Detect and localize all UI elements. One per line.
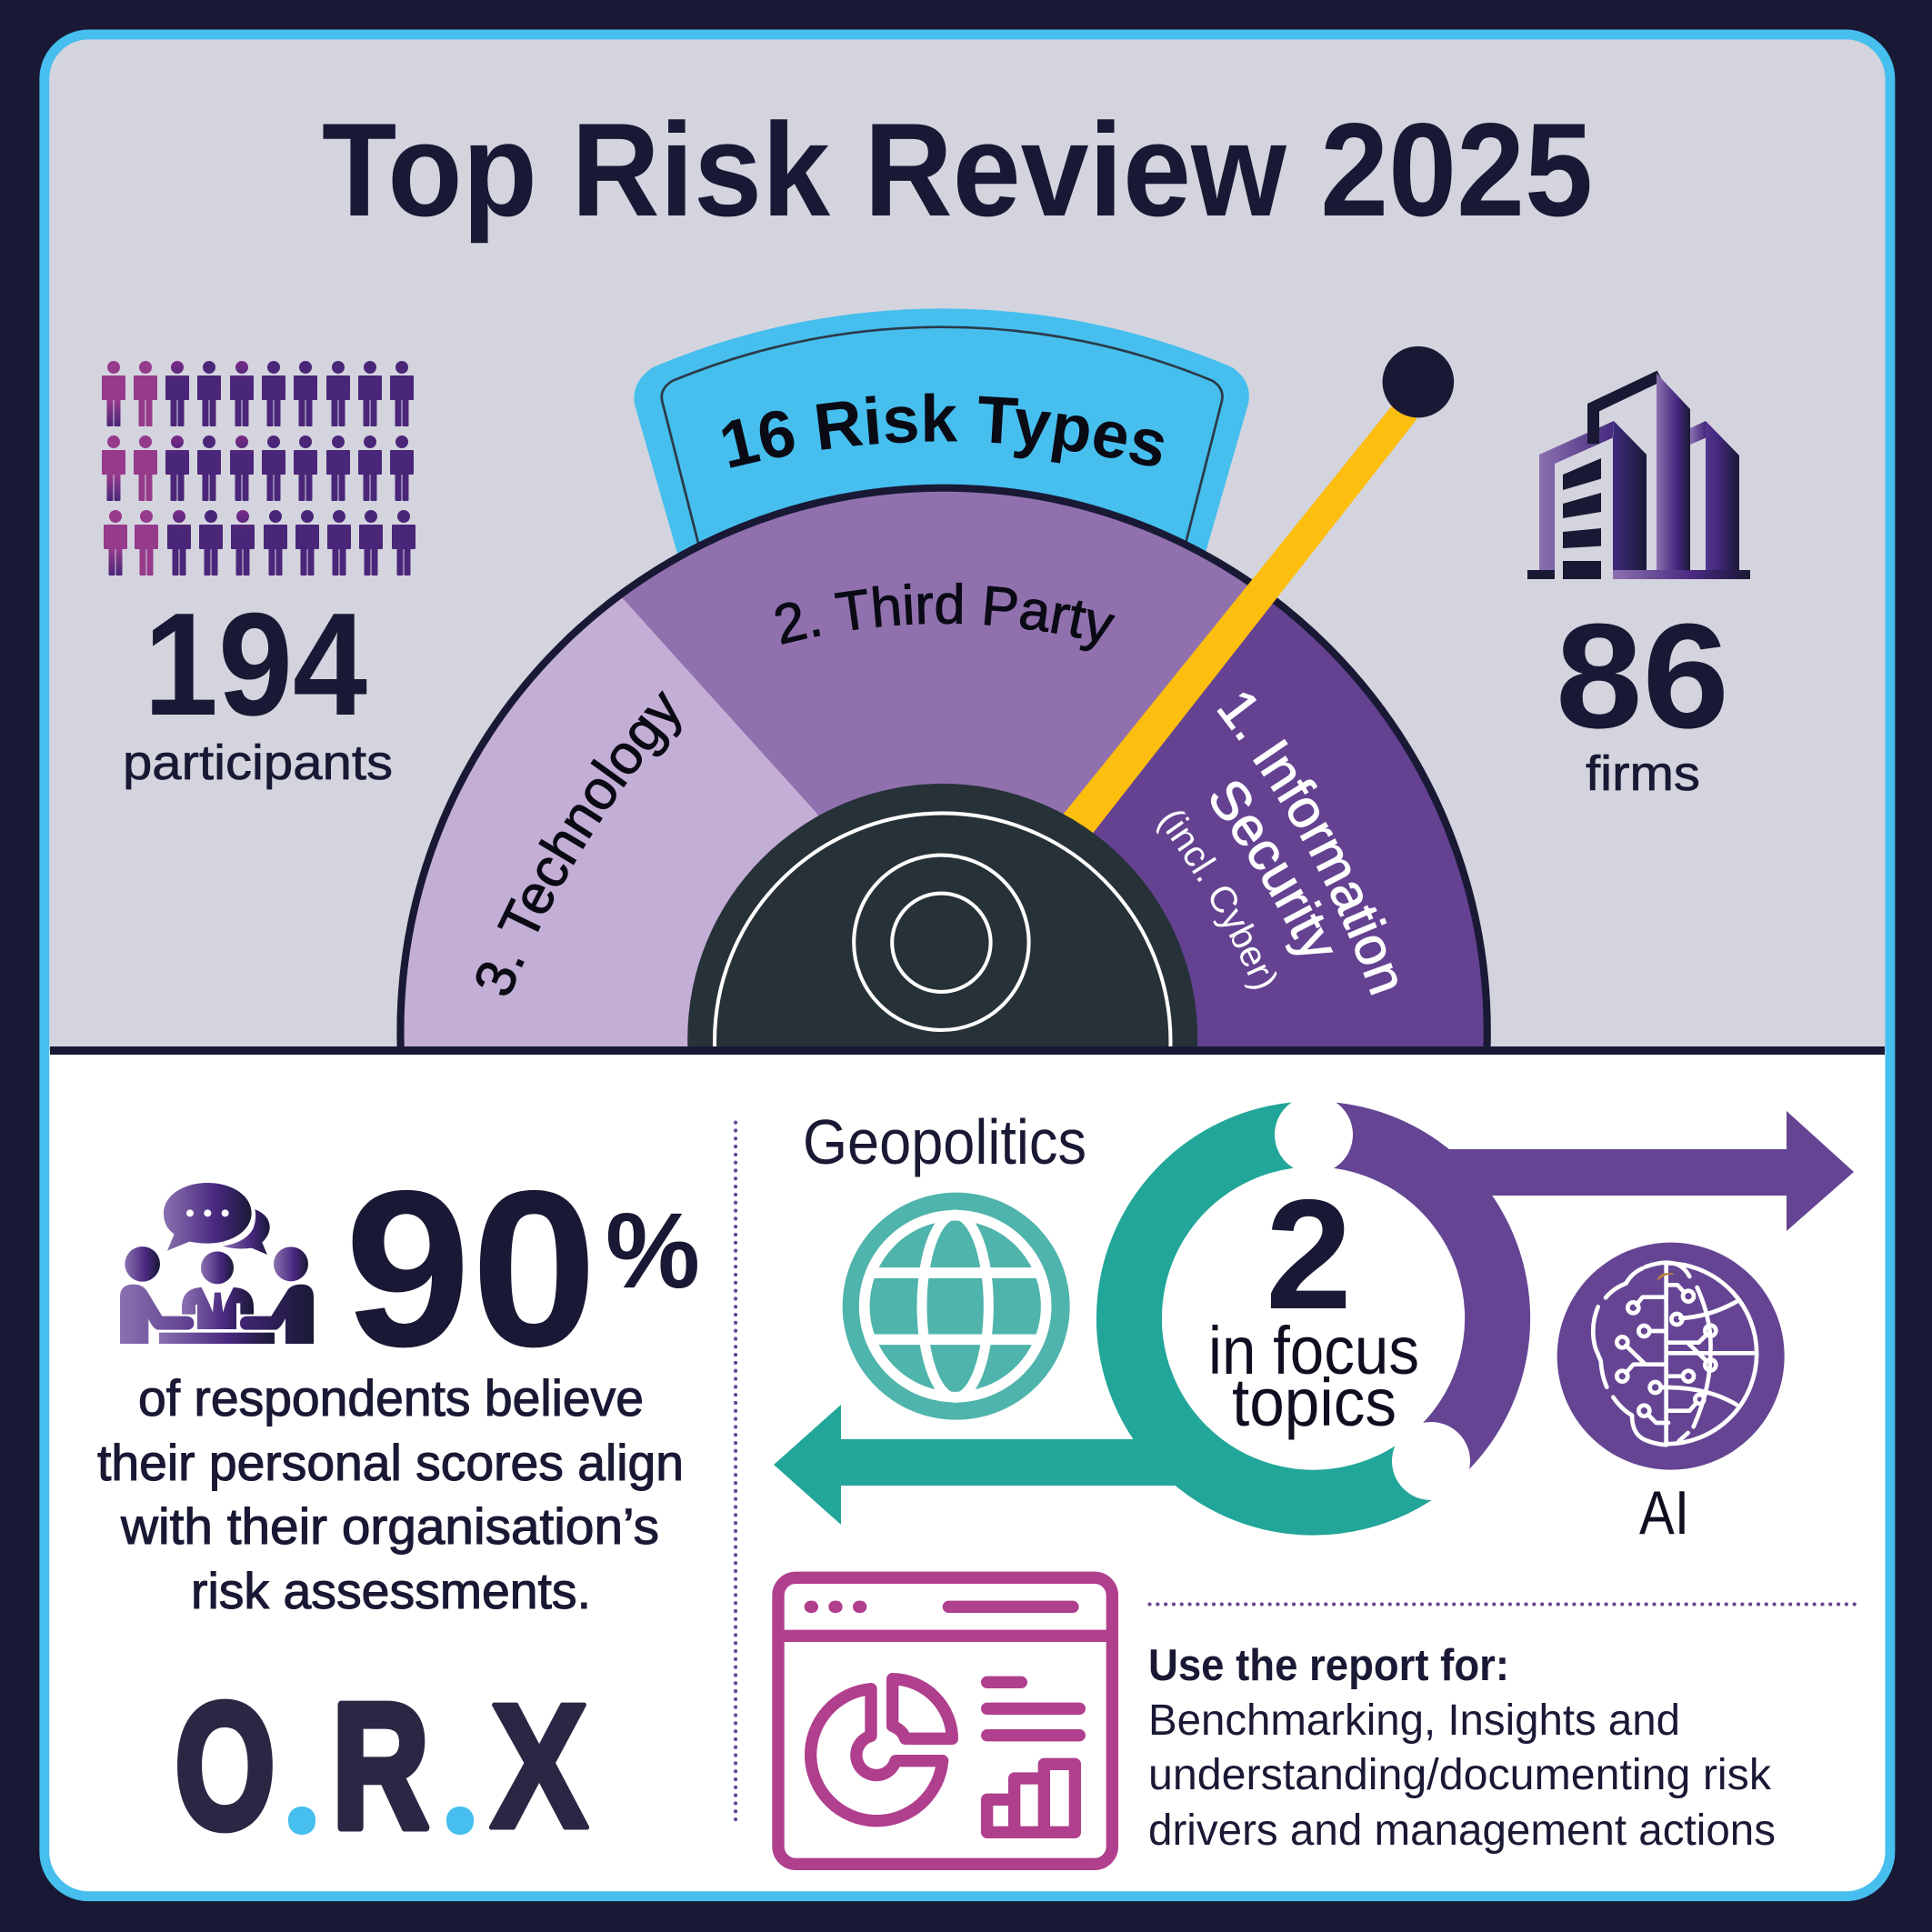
panel: participants — [102, 361, 415, 790]
statement text: risk assessments. — [191, 1562, 591, 1619]
ring notch: top — [1275, 1096, 1353, 1174]
icon: office buildings — [1527, 371, 1750, 579]
ring: teal half — [1129, 1134, 1432, 1503]
label: 3. Technology: 3. Technology — [476, 690, 682, 996]
panel: in focus topics — [774, 1096, 1854, 1547]
title: Top Risk Review 2025 — [322, 95, 1593, 244]
ring: purple half — [1314, 1134, 1497, 1459]
number: 194: 194 — [144, 583, 367, 746]
number: 90: 90 — [345, 1144, 597, 1393]
icon: grid of people — [102, 361, 415, 576]
hub — [687, 784, 1198, 1046]
panel: firms — [1527, 371, 1750, 801]
tab: 16 Risk Types: 16 Risk Types — [722, 393, 1164, 468]
statement text: their personal scores align — [97, 1434, 684, 1491]
needle ball — [1383, 346, 1454, 417]
segment: information security — [622, 598, 1484, 1046]
text block: use the report for — [1148, 1641, 1776, 1855]
number: 86: 86 — [1556, 593, 1729, 759]
divider between sections — [50, 1046, 1885, 1055]
label: firms: firms — [1586, 746, 1700, 801]
label: in focus: in focus — [1208, 1313, 1419, 1388]
label: Security: Security — [1211, 782, 1333, 955]
gauge dial — [396, 405, 1491, 1046]
arrow: teal pointing left — [774, 1405, 1182, 1525]
statement text: with their organisation’s — [120, 1497, 659, 1555]
panel: 90 percent statistic — [97, 1144, 700, 1619]
percent sign: % — [606, 1191, 700, 1311]
segment: third party — [622, 491, 1247, 816]
text block: use the report for: Benchmarking, Insights and — [1148, 1697, 1680, 1745]
text block: use the report for: understanding/documenting risk — [1148, 1751, 1772, 1799]
text block: use the report for: drivers and management actions — [1148, 1807, 1776, 1855]
icon: globe — [843, 1193, 1070, 1420]
label: participants: participants — [123, 736, 393, 790]
dial outline — [396, 484, 1491, 1046]
needle shaft — [1062, 399, 1417, 838]
label: Geopolitics: Geopolitics — [803, 1106, 1086, 1177]
tab: 16 Risk Types — [634, 308, 1249, 554]
arrow: purple pointing right — [1418, 1111, 1854, 1231]
logo: ORX: O — [175, 1667, 275, 1866]
label: 2. Third Party: 2. Third Party — [775, 582, 1116, 651]
text block: use the report for: Use the report for: — [1148, 1641, 1509, 1690]
logo: ORX: X — [489, 1667, 589, 1866]
label: incl. Cyber: (incl. Cyber) — [1156, 811, 1276, 989]
icon: AI brain globe — [1557, 1243, 1785, 1470]
label: AI: AI — [1639, 1478, 1689, 1547]
label: topics: topics — [1232, 1365, 1396, 1440]
panel: risk gauge — [396, 308, 1491, 1046]
icon: meeting with speech bubbles — [120, 1183, 314, 1344]
ring notch: lower right — [1392, 1422, 1470, 1500]
icon: report dashboard — [778, 1577, 1112, 1864]
logo: ORX — [175, 1667, 589, 1866]
statement text: of respondents believe — [138, 1369, 644, 1426]
label: 1. Information: 1. Information — [1216, 693, 1397, 996]
number: 2: 2 — [1266, 1167, 1352, 1342]
logo: ORX: R — [332, 1667, 429, 1866]
segment: technology — [404, 598, 818, 1046]
statement text — [97, 1369, 684, 1619]
